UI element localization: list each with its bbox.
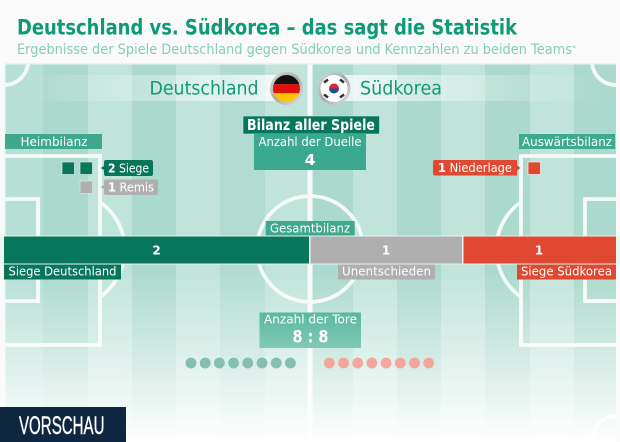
- bar segment: Siege Deutschland: 2: [152, 244, 161, 258]
- bar segment: Siege Südkorea: 1: [535, 244, 543, 258]
- stat box: Anzahl der Tore: Anzahl der Tore: [264, 312, 357, 326]
- label: Heimbilanz: Heimbilanz: [20, 134, 88, 149]
- heading: Bilanz aller Spiele: Bilanz aller Spiele: [247, 116, 375, 134]
- tag: 2 Siege: 2 Siege: [108, 160, 149, 176]
- stat box: Anzahl der Duelle: Anzahl der Duelle: [258, 134, 362, 149]
- label: Auswärtsbilanz: Auswärtsbilanz: [522, 134, 612, 149]
- subtitle: Ergebnisse der Spiele Deutschland gegen Südkorea und Kennzahlen zu beiden Teams: [17, 42, 572, 58]
- tag: 1 Niederlage: 1 Niederlage: [438, 160, 512, 175]
- stacked bar: Gesamtbilanz: [0, 236, 620, 264]
- bar segment: Siege Deutschland: [4, 236, 309, 264]
- label: Siege Südkorea: Siege Südkorea: [521, 264, 612, 278]
- icon: South Korean flag: [318, 72, 350, 105]
- home draw square: [80, 181, 92, 194]
- goal dots: Südkorea: [324, 358, 434, 368]
- team banner: Deutschland: [20, 75, 288, 101]
- badge: VORSCHAU: VORSCHAU: [19, 412, 104, 440]
- home wins squares: [62, 162, 92, 174]
- away loss square: [528, 162, 540, 174]
- bar segment: Unentschieden: [310, 236, 462, 264]
- bar segment: Unentschieden: 1: [382, 244, 390, 258]
- badge: VORSCHAU: [0, 407, 126, 442]
- icon: German flag: [270, 72, 303, 105]
- label: Unentschieden: Unentschieden: [342, 264, 431, 278]
- stat box: Anzahl der Tore: [260, 312, 361, 348]
- footnote asterisk: *: [572, 44, 576, 53]
- tag: 1 Remis: 1 Remis: [108, 180, 154, 194]
- team banner: Deutschland: Deutschland: [150, 78, 258, 100]
- team banner: Südkorea: [332, 75, 600, 101]
- label: Siege Deutschland: Siege Deutschland: [8, 264, 116, 278]
- stat box: Anzahl der Duelle: [254, 134, 366, 170]
- goal dots: Deutschland: [186, 358, 296, 368]
- stat box: Anzahl der Tore: 8 : 8: [292, 328, 328, 346]
- title: Deutschland vs. Südkorea – das sagt die Statistik: [17, 16, 518, 40]
- label: Gesamtbilanz: Gesamtbilanz: [270, 220, 350, 236]
- team banner: Südkorea: Südkorea: [360, 78, 442, 100]
- bar segment: Siege Südkorea: [464, 236, 616, 264]
- stat box: Anzahl der Duelle: 4: [305, 151, 316, 169]
